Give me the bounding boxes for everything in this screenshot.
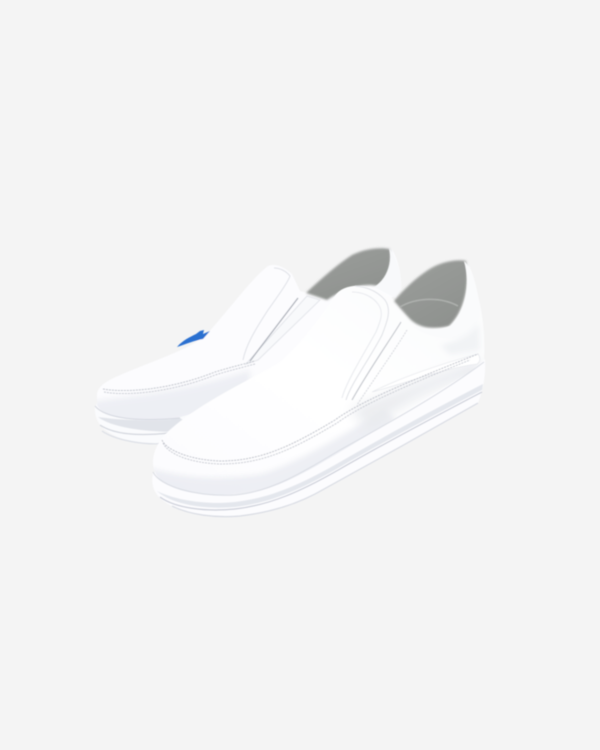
back shoe lining xyxy=(306,248,391,300)
front shoe sole groove band xyxy=(157,384,483,508)
front shoe heel shade xyxy=(440,322,480,355)
back shoe gusset xyxy=(246,296,320,364)
blue logo xyxy=(177,330,210,347)
back shoe toe shading xyxy=(98,372,250,419)
back shoe xyxy=(92,247,401,444)
back shoe sole lines xyxy=(95,406,180,420)
front shoe gusset line xyxy=(352,322,401,400)
front shoe sole lower line xyxy=(160,392,482,510)
front shoe sole ledge line xyxy=(153,362,484,495)
back shoe heel collar xyxy=(374,248,401,298)
front shoe lining fold xyxy=(400,299,458,307)
back shoe sole bottom edge xyxy=(102,431,168,444)
back shoe upper xyxy=(97,247,401,419)
back shoe gusset line xyxy=(250,298,298,361)
front shoe heel collar xyxy=(412,261,480,339)
back shoe toe stitching xyxy=(103,361,255,391)
front shoe tongue seam xyxy=(346,286,388,400)
front shoe gusset stitch xyxy=(357,330,407,405)
back shoe sole groove band xyxy=(98,417,190,432)
front shoe xyxy=(150,260,485,517)
front shoe sole bottom edge xyxy=(172,403,478,517)
front shoe sole xyxy=(152,345,485,517)
front shoe lining xyxy=(394,260,467,328)
front shoe upper xyxy=(153,261,484,495)
back shoe tongue seam xyxy=(243,268,290,360)
front shoe toe stitching xyxy=(162,354,478,461)
product photo: pair of white slip-on shoes xyxy=(94,246,484,518)
front shoe side seam xyxy=(372,354,480,392)
front shoe toe shading xyxy=(155,365,477,494)
back shoe sole xyxy=(95,370,300,444)
